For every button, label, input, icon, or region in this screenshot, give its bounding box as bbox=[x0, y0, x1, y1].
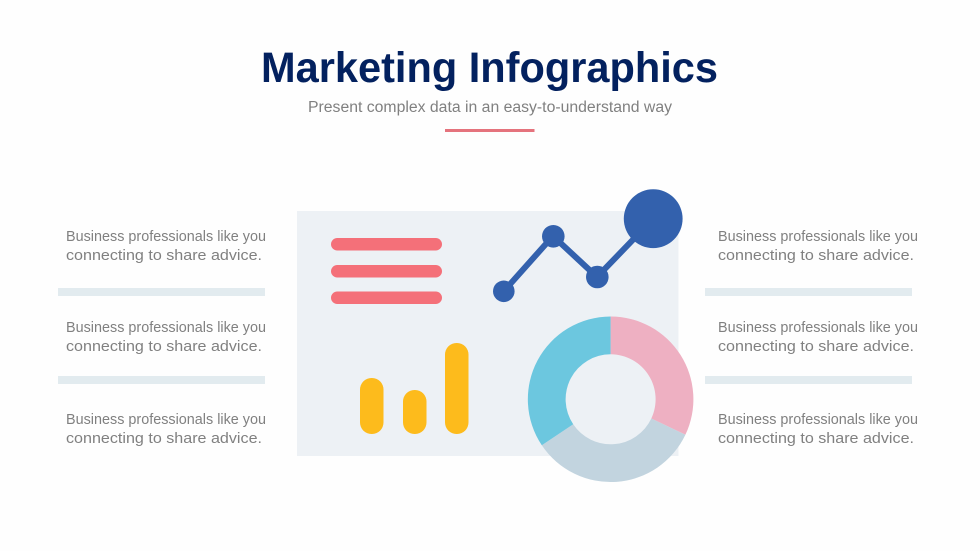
donut segment: cyan bbox=[528, 316, 611, 445]
title underline bbox=[445, 129, 534, 132]
donut segment: pink bbox=[611, 316, 693, 435]
left text block 3: connecting to share advice. bbox=[66, 430, 262, 447]
line chart bbox=[493, 189, 683, 302]
left text block 1: connecting to share advice. bbox=[66, 247, 262, 264]
right text column bbox=[705, 228, 918, 447]
left text block 2: Business professionals like you bbox=[66, 319, 266, 336]
right text block 3: Business professionals like you bbox=[718, 411, 918, 428]
left text block 1: Business professionals like you bbox=[66, 228, 266, 245]
icon: red text lines bbox=[331, 238, 442, 304]
right text block 1: Business professionals like you bbox=[718, 228, 918, 245]
right text block 3: connecting to share advice. bbox=[718, 430, 914, 447]
left text block 3: Business professionals like you bbox=[66, 411, 266, 428]
title: Marketing Infographics bbox=[261, 44, 718, 92]
bar chart bbox=[360, 343, 468, 434]
subtitle: Present complex data in an easy-to-understand way bbox=[308, 99, 672, 116]
left text column bbox=[58, 228, 266, 447]
right text block 2: connecting to share advice. bbox=[718, 338, 914, 355]
donut chart bbox=[528, 316, 693, 482]
right text block 2: Business professionals like you bbox=[718, 319, 918, 336]
donut segment: grey blue bbox=[542, 418, 685, 482]
left text block 2: connecting to share advice. bbox=[66, 338, 262, 355]
panel: dashboard illustration bbox=[297, 189, 693, 482]
dashboard background bbox=[297, 211, 678, 456]
right text block 1: connecting to share advice. bbox=[718, 247, 914, 264]
